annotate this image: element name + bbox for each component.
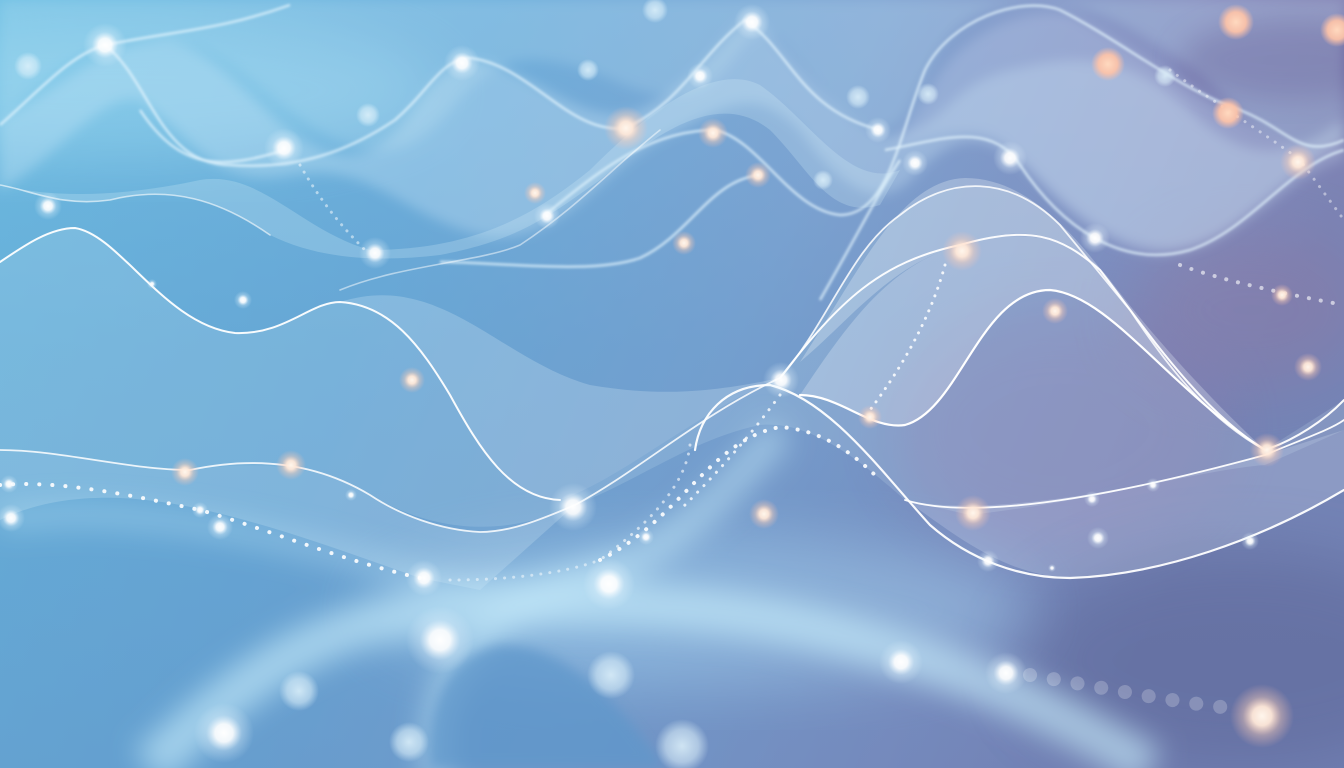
glowing peach nodes — [171, 106, 1322, 748]
top ribbon highlight lines — [0, 5, 1344, 300]
bottom blurred light ribbons — [0, 430, 1150, 768]
mid translucent ribbons — [0, 79, 1344, 590]
orange blurred nodes top right — [1091, 4, 1344, 129]
crisp white wave lines — [0, 130, 1344, 578]
soft upper ribbons — [0, 0, 1344, 255]
lower dark inner wave — [429, 645, 665, 768]
